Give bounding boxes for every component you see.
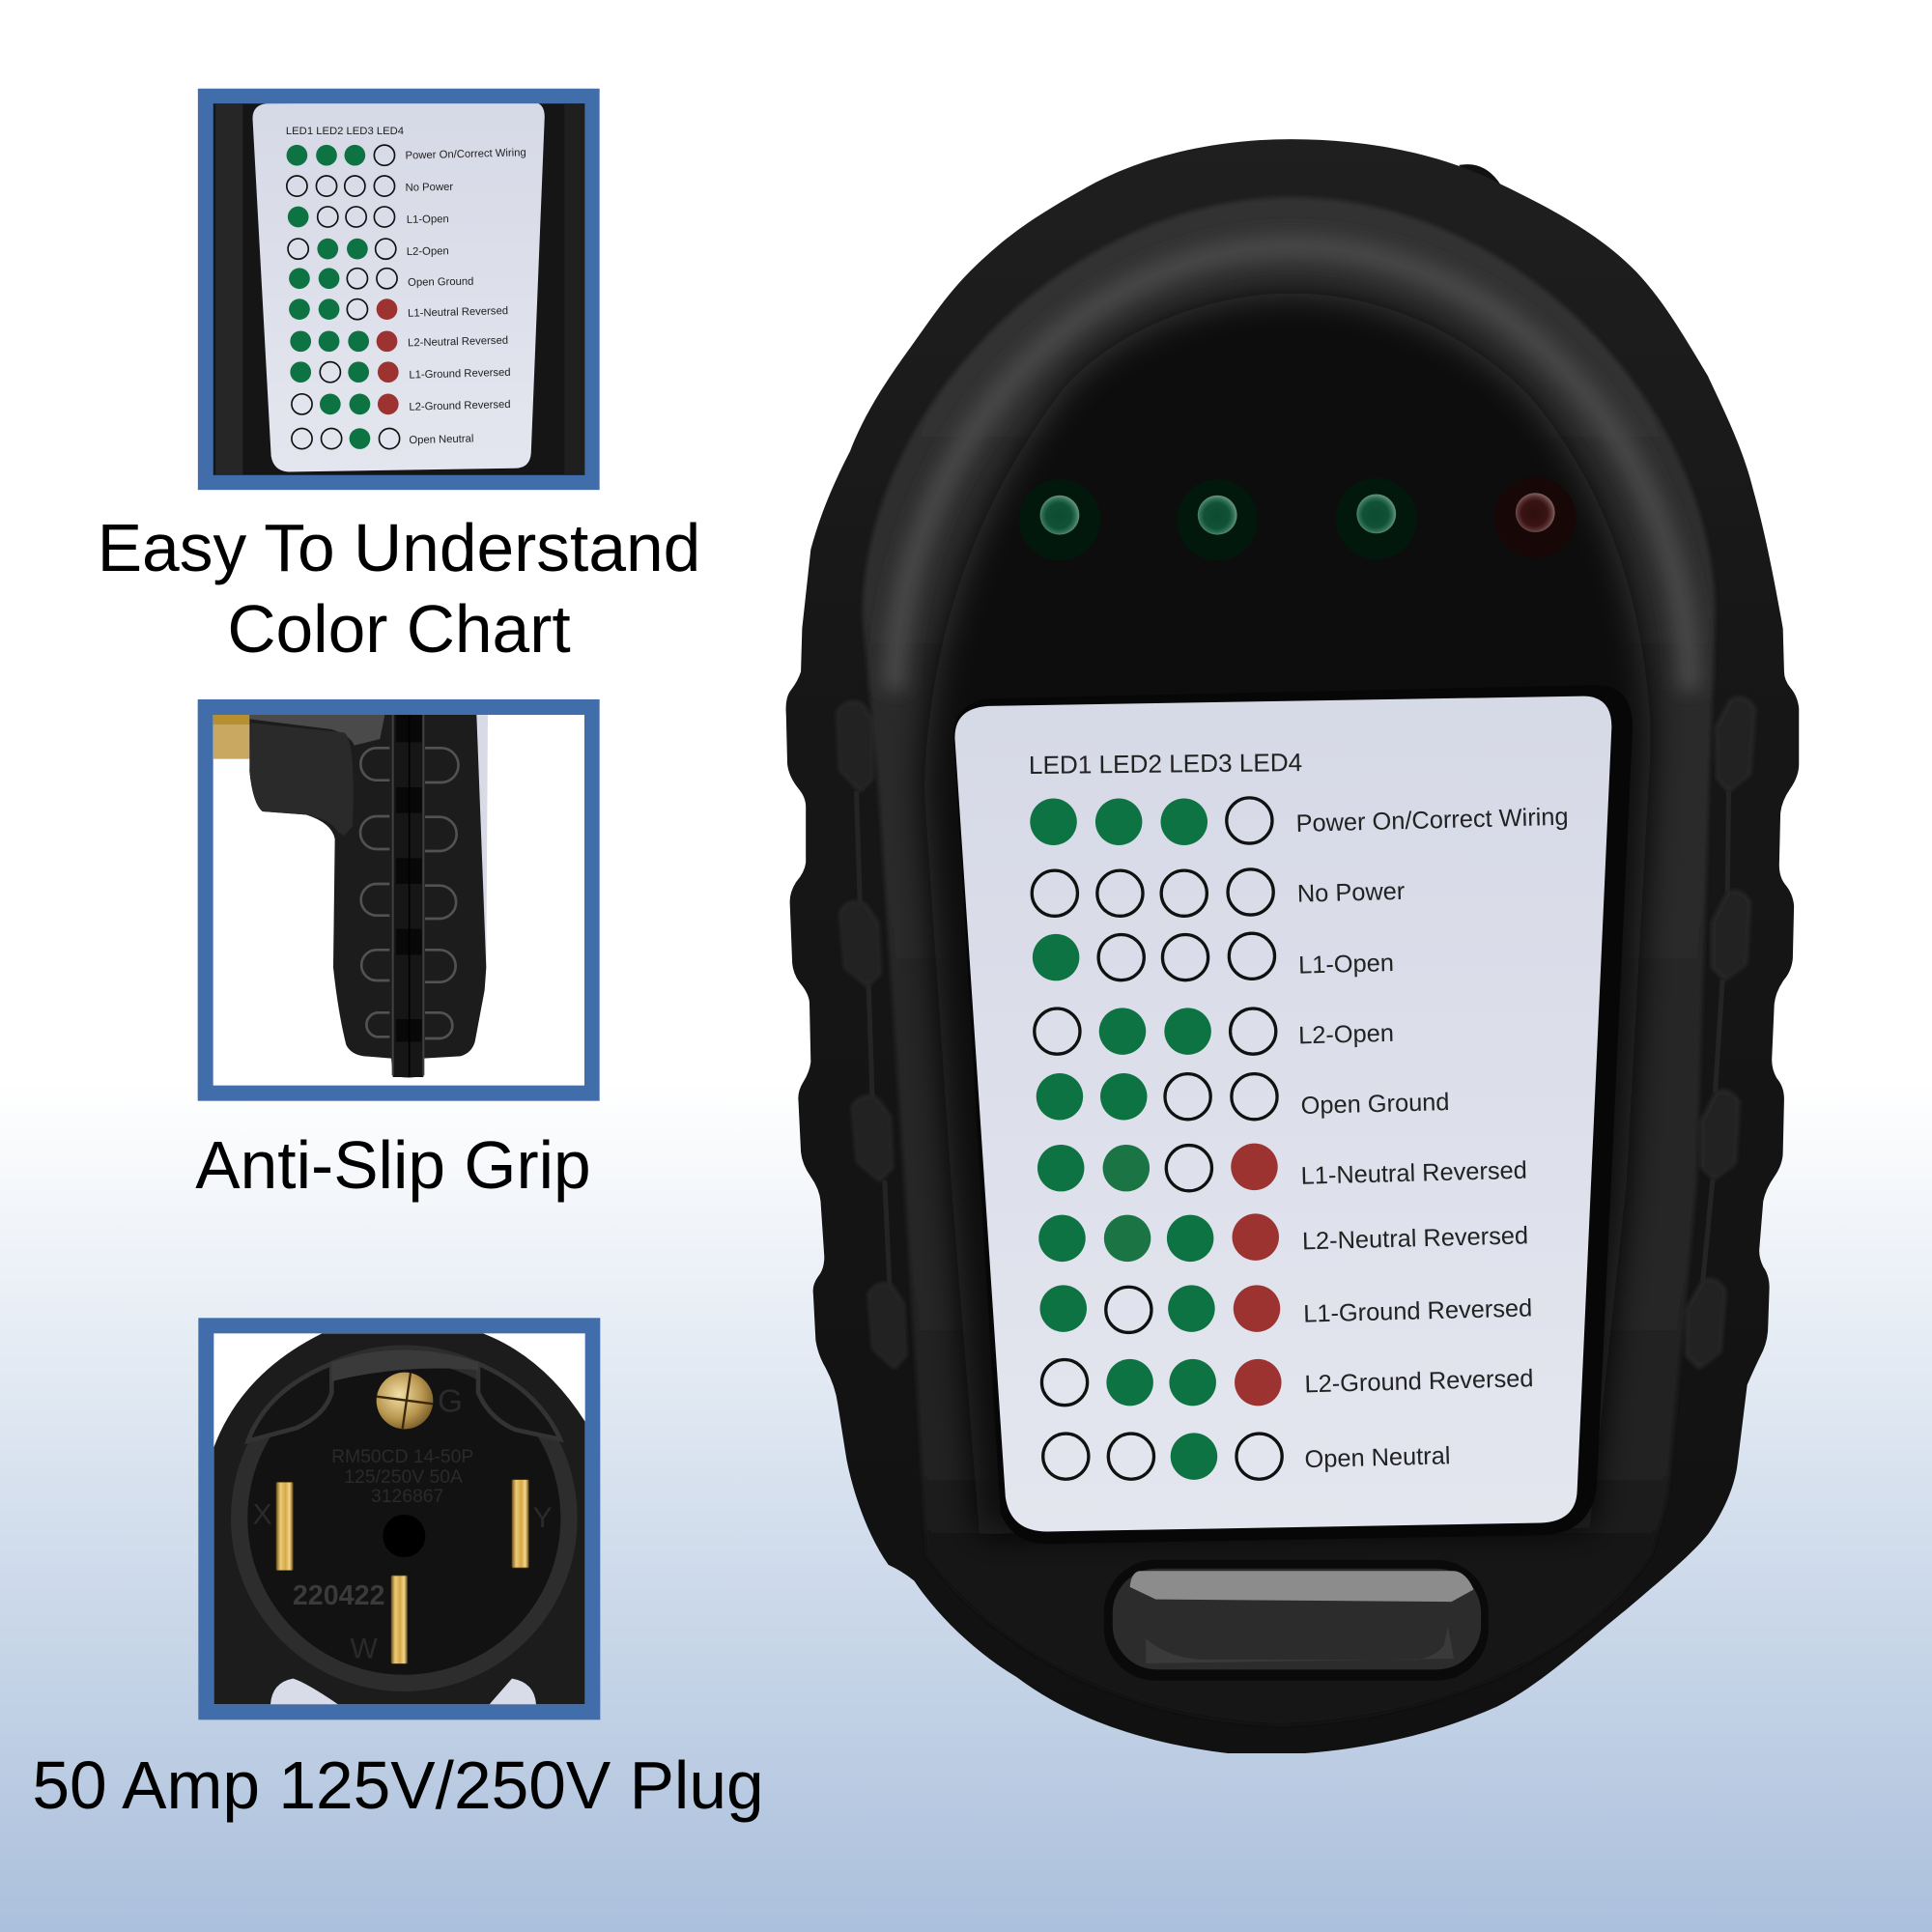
molded markings: X: [253, 1499, 272, 1531]
caption: Anti-Slip Grip: Anti-Slip Grip: [195, 1127, 591, 1203]
inset photo: side view of tester: [213, 715, 488, 1077]
inset chart text: LED1 LED2 LED3 LED4: [286, 126, 404, 137]
inset chart text: Open Ground: [408, 276, 474, 289]
molded markings: 125/250V 50A: [344, 1467, 463, 1488]
dark center: [924, 294, 1651, 1534]
inset chart text: No Power: [405, 182, 453, 194]
hanging slot: [1104, 1560, 1489, 1681]
row: Power On/Correct Wiring: [1030, 798, 1569, 845]
row: Open Neutral: Open Neutral: [1304, 1442, 1451, 1473]
row: L1-Ground Reversed: [1040, 1285, 1533, 1332]
inset chart text: Open Neutral: [409, 433, 474, 446]
molded markings: 220422: [293, 1580, 384, 1611]
inset photo: chart closeup: [213, 102, 585, 475]
molded markings: RM50CD 14-50P: [331, 1447, 473, 1467]
inset chart text: L1-Open: [407, 213, 449, 226]
inset background: [213, 715, 584, 1086]
panel: LED status chart label: [954, 696, 1611, 1531]
inset chart text: L1-Ground Reversed: [409, 367, 511, 382]
molded markings: Y: [533, 1502, 553, 1534]
caption: Easy To Understand Color Chart: Easy To Understand: [98, 510, 700, 585]
device body: [786, 139, 1799, 1753]
molded markings: 3126867: [371, 1487, 443, 1507]
caption: Easy To Understand Color Chart: Color Chart: [227, 591, 571, 667]
column headers: LED1 LED2 LED3 LED4: [1029, 748, 1302, 780]
inset chart text: [286, 126, 526, 446]
label recess: [953, 685, 1633, 1544]
row: L1-Neutral Reversed: L1-Neutral Reversed: [1300, 1157, 1527, 1190]
inset frame: [198, 699, 600, 1101]
caption: Easy To Understand Color Chart: [98, 510, 700, 667]
LED indicators: [1019, 477, 1576, 560]
panel: 50 amp plug inset: [198, 1318, 600, 1719]
label card: [954, 696, 1611, 1531]
inset photo: plug face: [213, 1333, 585, 1704]
inset chart text: L2-Neutral Reversed: [408, 335, 508, 349]
row: L1-Open: L1-Open: [1298, 950, 1394, 980]
inset frame: [198, 89, 600, 490]
molded markings: [253, 1384, 553, 1665]
blades: [276, 1480, 528, 1663]
row: Power On/Correct Wiring: Power On/Correct Wiring: [1295, 804, 1569, 838]
panel: anti-slip grip inset: [198, 699, 600, 1101]
row: L2-Neutral Reversed: L2-Neutral Reversed: [1302, 1222, 1528, 1255]
row: Open Neutral: [1043, 1433, 1451, 1480]
row: L2-Open: [1035, 1008, 1394, 1055]
molded markings: G: [438, 1384, 463, 1420]
inset chart text: L1-Neutral Reversed: [408, 305, 508, 320]
inset chart text: Power On/Correct Wiring: [405, 147, 526, 162]
caption: 50 Amp 125V/250V Plug: 50 Amp 125V/250V Plug: [32, 1747, 764, 1823]
inset chart text: L2-Ground Reversed: [409, 399, 511, 413]
inset frame: [198, 1318, 600, 1719]
row: L1-Ground Reversed: L1-Ground Reversed: [1303, 1294, 1533, 1328]
grip nubs left: [838, 702, 905, 1368]
grip nubs right: [1687, 698, 1754, 1368]
screw: [377, 1373, 433, 1429]
inset chart text: L2-Open: [407, 245, 449, 258]
nub rails: [856, 791, 1729, 1288]
row: No Power: [1032, 869, 1406, 916]
panel: color chart inset: [198, 89, 600, 490]
row: L2-Neutral Reversed: [1038, 1213, 1528, 1262]
panel: main device tester: [786, 139, 1799, 1753]
inset background: [213, 1333, 585, 1704]
raised inner band: [862, 197, 1716, 1533]
row: L2-Open: L2-Open: [1298, 1020, 1394, 1049]
inset chart dots: [287, 145, 370, 449]
row: L1-Neutral Reversed: [1037, 1144, 1527, 1191]
row: L2-Ground Reversed: L2-Ground Reversed: [1304, 1365, 1534, 1398]
row: L1-Open: [1033, 933, 1394, 980]
row: L2-Ground Reversed: [1041, 1359, 1534, 1406]
molded markings: W: [351, 1634, 379, 1665]
row: Open Ground: [1037, 1073, 1450, 1120]
ground hole: [383, 1515, 425, 1557]
row: No Power: No Power: [1297, 878, 1406, 908]
band top highlight: [895, 246, 1690, 690]
row: Open Ground: Open Ground: [1300, 1089, 1450, 1120]
